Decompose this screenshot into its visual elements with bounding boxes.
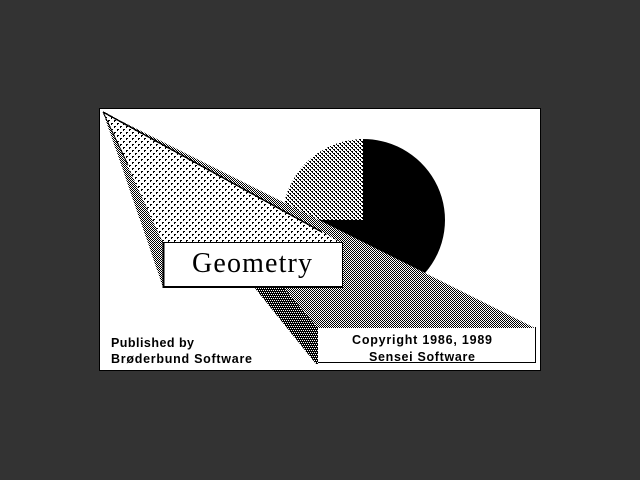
publisher credit — [111, 336, 252, 366]
pie chart — [284, 139, 445, 273]
dark shaded wedge — [254, 287, 318, 364]
gray triangular plane — [103, 112, 535, 328]
dotted triangle — [103, 112, 342, 243]
triangle edge lines — [103, 112, 322, 232]
pie: black sector — [318, 139, 445, 273]
title text: Geometry — [192, 248, 312, 279]
copyright text: Sensei Software — [369, 350, 475, 364]
copyright text: Copyright 1986, 1989 — [352, 333, 492, 347]
publisher credit: Published by — [111, 336, 194, 350]
title box — [163, 242, 343, 287]
white window panel — [100, 108, 540, 370]
copyright text — [352, 333, 492, 364]
copyright box — [318, 327, 536, 364]
publisher credit: Brøderbund Software — [111, 352, 252, 366]
pie: hatched sector — [284, 139, 363, 220]
